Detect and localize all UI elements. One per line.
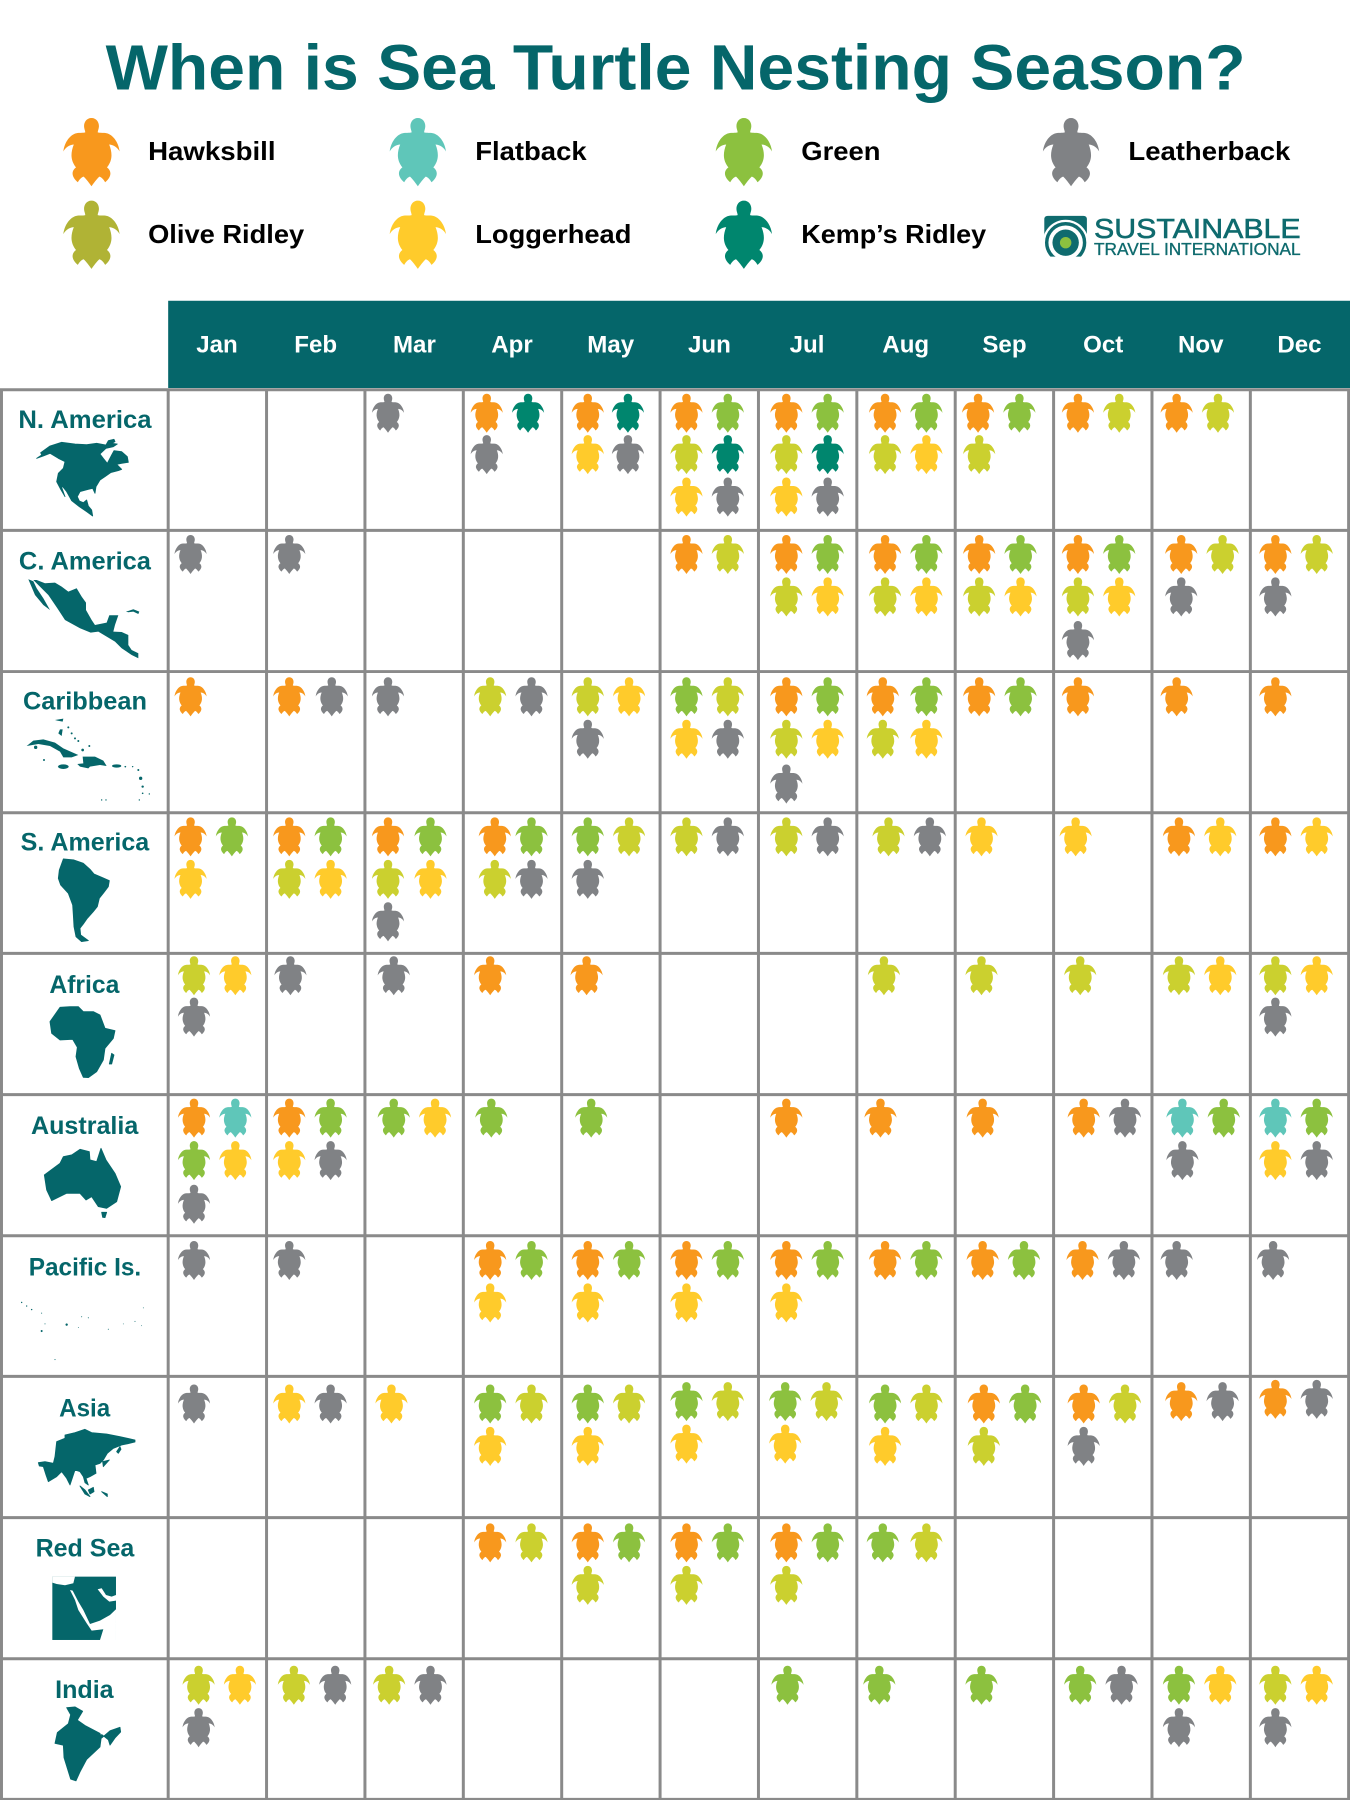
label: S. America: S. America [21, 829, 150, 857]
S. America Jan [174, 817, 248, 899]
Africa Mar [378, 956, 410, 995]
Asia Sep [968, 1384, 1041, 1466]
Red Sea May [572, 1523, 645, 1605]
C. America Aug [869, 535, 942, 616]
Pacific Is. Dec [1257, 1241, 1289, 1280]
Asia Oct [1068, 1384, 1141, 1466]
month header bar: Sep [982, 331, 1027, 358]
label: India [55, 1676, 121, 1781]
N. America Jun [670, 394, 744, 517]
S. America Jun [670, 817, 744, 856]
legend: Flatback [390, 118, 587, 186]
Asia Jan [178, 1384, 210, 1423]
Africa Sep [965, 956, 998, 995]
C. America Nov [1165, 535, 1239, 616]
Caribbean Jun [670, 677, 744, 759]
logo: Sustainable Travel International: TRAVEL INTERNATIONAL [1094, 239, 1301, 259]
legend: Flatback: Flatback [475, 138, 587, 166]
Caribbean Apr [474, 677, 548, 716]
India Mar [373, 1666, 447, 1705]
label: Africa: Africa [49, 971, 120, 999]
S. America Feb [273, 817, 347, 899]
month header bar: Jun [688, 331, 731, 358]
C. America Sep [963, 535, 1037, 616]
C. America Jun [670, 535, 744, 574]
row: Pacific Is. turtles [178, 1241, 1289, 1322]
logo: Sustainable Travel International [1044, 216, 1300, 257]
label: C. America: C. America [19, 547, 152, 575]
S. America Aug [872, 817, 946, 856]
label: C. America [19, 547, 152, 658]
Red Sea Jun [670, 1523, 744, 1605]
title: When is Sea Turtle Nesting Season? [106, 32, 1246, 104]
Pacific Is. Nov [1161, 1241, 1193, 1280]
Africa Feb [274, 956, 307, 995]
row: C. America turtles [174, 535, 1333, 660]
month header bar: Jan [196, 331, 238, 358]
India Dec [1259, 1666, 1333, 1747]
Africa Jan [178, 956, 251, 1037]
S. America Mar [372, 817, 447, 941]
legend: Green: Green [801, 138, 880, 166]
label: Asia: Asia [59, 1395, 111, 1423]
N. America Nov [1161, 394, 1234, 433]
label: N. America: N. America [18, 406, 153, 434]
Pacific Is. Jan [178, 1241, 210, 1280]
N. America Jul [770, 394, 844, 517]
Caribbean May [572, 677, 645, 759]
legend: Loggerhead: Loggerhead [475, 221, 631, 249]
S. America Jul [770, 817, 844, 856]
Red Sea Apr [474, 1523, 548, 1562]
Caribbean Feb [273, 677, 348, 716]
India Oct [1064, 1666, 1138, 1705]
row: S. America turtles [174, 817, 1333, 941]
month header bar: May [587, 331, 635, 358]
Africa May [571, 956, 603, 995]
label: Red Sea: Red Sea [36, 1535, 135, 1563]
Asia May [572, 1384, 645, 1466]
label: Caribbean [23, 687, 150, 801]
Pacific Is. Aug [869, 1241, 942, 1280]
C. America Jan [174, 535, 207, 574]
N. America Oct [1062, 394, 1135, 433]
India Aug [863, 1666, 895, 1705]
Caribbean Nov [1161, 677, 1193, 716]
Africa Nov [1163, 956, 1236, 995]
month header bar: Nov [1178, 331, 1224, 358]
Asia Feb [273, 1384, 347, 1423]
C. America Oct [1062, 535, 1135, 660]
N. America Apr [471, 394, 544, 474]
Caribbean Mar [372, 677, 404, 716]
legend [63, 118, 1291, 269]
month header bar [168, 301, 1350, 388]
Australia Dec [1259, 1099, 1333, 1180]
month header bar: Oct [1083, 331, 1123, 358]
N. America May [572, 394, 644, 474]
India Jan [183, 1666, 256, 1747]
S. America Nov [1163, 817, 1236, 856]
Pacific Is. Feb [273, 1241, 305, 1280]
Caribbean Sep [963, 677, 1037, 716]
Australia Jul [770, 1099, 802, 1138]
S. America May [572, 817, 645, 899]
month header bar: Dec [1277, 331, 1322, 358]
month header bar: Jul [790, 331, 824, 358]
legend: Kemp's Ridley [716, 201, 987, 269]
Caribbean Dec [1259, 677, 1291, 716]
Red Sea Jul [770, 1523, 844, 1605]
label: Australia: Australia [31, 1112, 139, 1140]
legend: Olive Ridley [63, 201, 305, 269]
legend: Loggerhead [390, 201, 631, 269]
Asia Jul [769, 1382, 843, 1464]
Australia Jan [178, 1099, 251, 1224]
S. America Sep [965, 817, 998, 856]
Caribbean Jan [174, 677, 207, 716]
Asia Apr [474, 1384, 548, 1466]
Pacific Is. Oct [1066, 1241, 1140, 1280]
C. America Feb [273, 535, 305, 574]
row: Africa turtles [178, 956, 1333, 1037]
Caribbean Oct [1062, 677, 1094, 716]
Red Sea Aug [867, 1523, 942, 1562]
N. America Sep [962, 394, 1035, 474]
legend: Olive Ridley: Olive Ridley [148, 221, 305, 249]
India Sep [965, 1666, 998, 1705]
row labels and maps [18, 406, 153, 1781]
row: N. America turtles [372, 394, 1234, 517]
label: Red Sea [36, 1535, 135, 1640]
Australia Sep [967, 1099, 999, 1138]
Asia Dec [1259, 1380, 1333, 1419]
label: India: India [55, 1676, 115, 1704]
Pacific Is. Apr [474, 1241, 548, 1322]
Australia Apr [475, 1099, 507, 1138]
month header bar: Apr [491, 331, 533, 358]
label: N. America [18, 406, 153, 516]
legend: Hawksbill [63, 118, 276, 186]
Caribbean Jul [770, 677, 844, 804]
legend: Leatherback: Leatherback [1128, 138, 1291, 166]
S. America Dec [1259, 817, 1333, 856]
legend: Hawksbill: Hawksbill [148, 138, 276, 166]
Africa Aug [868, 956, 900, 995]
Pacific Is. May [572, 1241, 645, 1322]
label: Africa [49, 971, 120, 1078]
Australia Feb [273, 1099, 347, 1180]
month header bar: Feb [294, 331, 337, 358]
Pacific Is. Jul [770, 1241, 844, 1322]
legend: Kemp's Ridley: Kemp’s Ridley [801, 221, 987, 249]
N. America Mar [372, 394, 404, 433]
Australia May [575, 1099, 607, 1138]
label: Pacific Is.: Pacific Is. [29, 1253, 141, 1281]
Australia Oct [1068, 1099, 1141, 1138]
label: Pacific Is. [21, 1253, 144, 1360]
row: Red Sea turtles [474, 1523, 942, 1605]
Africa Dec [1259, 956, 1333, 1037]
N. America Aug [869, 394, 942, 474]
Australia Nov [1166, 1099, 1240, 1180]
Asia Jun [670, 1382, 744, 1464]
S. America Apr [479, 817, 548, 899]
legend: Leatherback [1043, 118, 1291, 186]
India Jul [771, 1666, 804, 1705]
row: Asia turtles [178, 1380, 1333, 1466]
Australia Aug [864, 1099, 897, 1138]
Africa Oct [1064, 956, 1096, 995]
Africa Apr [474, 956, 506, 995]
row: Caribbean turtles [174, 677, 1291, 804]
Asia Mar [375, 1384, 408, 1423]
logo: Sustainable Travel International: SUSTAINABLE [1094, 213, 1301, 244]
Caribbean Aug [867, 677, 942, 759]
C. America Dec [1259, 535, 1333, 616]
label: S. America [21, 829, 150, 942]
legend: Green [716, 118, 880, 186]
Australia Mar [378, 1099, 451, 1138]
label: Caribbean: Caribbean [23, 687, 147, 715]
month header bar: Aug [882, 331, 929, 358]
month header bar: Mar [393, 331, 436, 358]
S. America Oct [1060, 817, 1092, 856]
India Feb [278, 1666, 351, 1705]
Pacific Is. Sep [967, 1241, 1040, 1280]
Asia Nov [1165, 1382, 1239, 1421]
Asia Aug [869, 1384, 942, 1466]
Pacific Is. Jun [670, 1241, 744, 1322]
label: Asia [38, 1395, 135, 1497]
row: Australia turtles [178, 1099, 1333, 1224]
row: India turtles [183, 1666, 1333, 1747]
label: Australia [31, 1112, 139, 1218]
C. America Jul [770, 535, 844, 616]
India Nov [1163, 1666, 1236, 1747]
